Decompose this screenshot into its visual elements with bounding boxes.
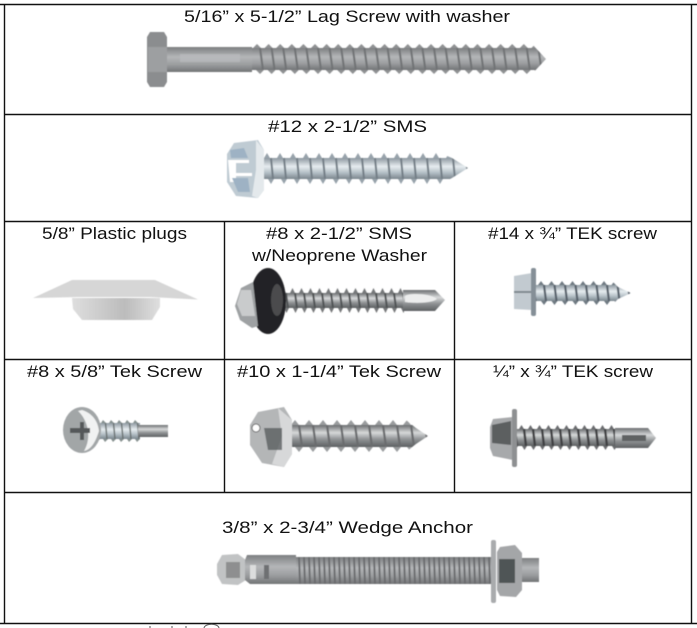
icon: #10 Tek screw — [250, 407, 428, 467]
panel: #10 Tek — [225, 360, 454, 492]
label: #10 Tek: #10 x 1-1/4” Tek Screw — [237, 362, 442, 381]
icon: 1/4 TEK screw — [490, 409, 656, 467]
label: lag screw: 5/16” x 5-1/2” Lag Screw with washer — [184, 7, 510, 26]
panel: #12 SMS — [5, 115, 691, 221]
label: wedge anchor: 3/8” x 2-3/4” Wedge Anchor — [222, 518, 473, 537]
clipped footer marks — [150, 624, 219, 628]
panel: 1/4 TEK — [455, 360, 691, 492]
panel: neoprene washer SMS — [225, 222, 454, 359]
icon: #14 TEK screw — [514, 268, 631, 316]
label: neoprene washer SMS: #8 x 2-1/2” SMS — [266, 224, 412, 243]
icon: wedge anchor — [217, 540, 539, 603]
label: plastic plugs: 5/8” Plastic plugs — [42, 224, 187, 243]
icon: neoprene washer screw — [235, 268, 445, 334]
panel: wedge anchor — [5, 493, 691, 623]
label: #8 Tek: #8 x 5/8” Tek Screw — [27, 362, 203, 381]
icon: #8 Tek screw — [63, 407, 168, 453]
panel: plastic plugs — [5, 222, 224, 359]
label: neoprene washer second line: w/Neoprene Washer — [251, 246, 427, 265]
panel: lag screw — [5, 5, 691, 114]
panel: #8 Tek — [5, 360, 224, 492]
label: 1/4 TEK: ¼” x ¾” TEK screw — [493, 362, 654, 381]
label: #14 TEK: #14 x ¾” TEK screw — [488, 224, 658, 243]
icon: plastic plug — [33, 280, 198, 320]
label: #12 SMS: #12 x 2-1/2” SMS — [268, 117, 427, 136]
icon: #12 SMS screw — [227, 140, 468, 198]
panel: #14 TEK — [455, 222, 691, 359]
icon: lag screw — [147, 32, 546, 87]
